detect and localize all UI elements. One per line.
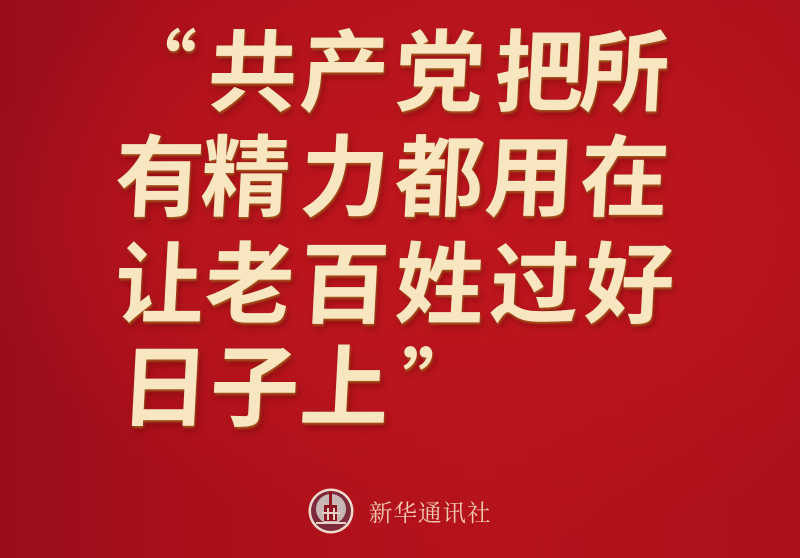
line 4: 上 xyxy=(297,316,393,445)
line 1: 共 xyxy=(205,1,301,130)
line 3: 老 xyxy=(202,213,298,342)
icon: Xinhua logo xyxy=(308,488,354,534)
line 3: 过 xyxy=(487,213,583,342)
line 2: 在 xyxy=(577,106,673,235)
line 4: 子 xyxy=(207,316,303,445)
line 1: 党 xyxy=(392,1,488,130)
line 1: 产 xyxy=(297,1,393,130)
agency name: 新华通讯社 xyxy=(369,494,492,528)
line 3: 姓 xyxy=(392,213,488,342)
line 3: 好 xyxy=(582,213,678,342)
line 1 xyxy=(117,1,673,130)
line 3: 百 xyxy=(297,213,393,342)
line 3 xyxy=(112,213,678,342)
line 2: 有 xyxy=(112,106,208,235)
line 2 xyxy=(112,106,673,235)
line 4: ” xyxy=(398,323,480,433)
line 1: 把 xyxy=(492,1,588,130)
line 4 xyxy=(117,316,480,445)
line 2: 用 xyxy=(482,106,578,235)
line 2: 力 xyxy=(297,106,393,235)
line 4: 日 xyxy=(117,316,213,445)
line 3: 让 xyxy=(112,213,208,342)
title: golden quote: “ xyxy=(117,5,199,115)
line 2: 都 xyxy=(392,106,488,235)
line 1: 所 xyxy=(577,1,673,130)
line 2: 精 xyxy=(198,106,294,235)
